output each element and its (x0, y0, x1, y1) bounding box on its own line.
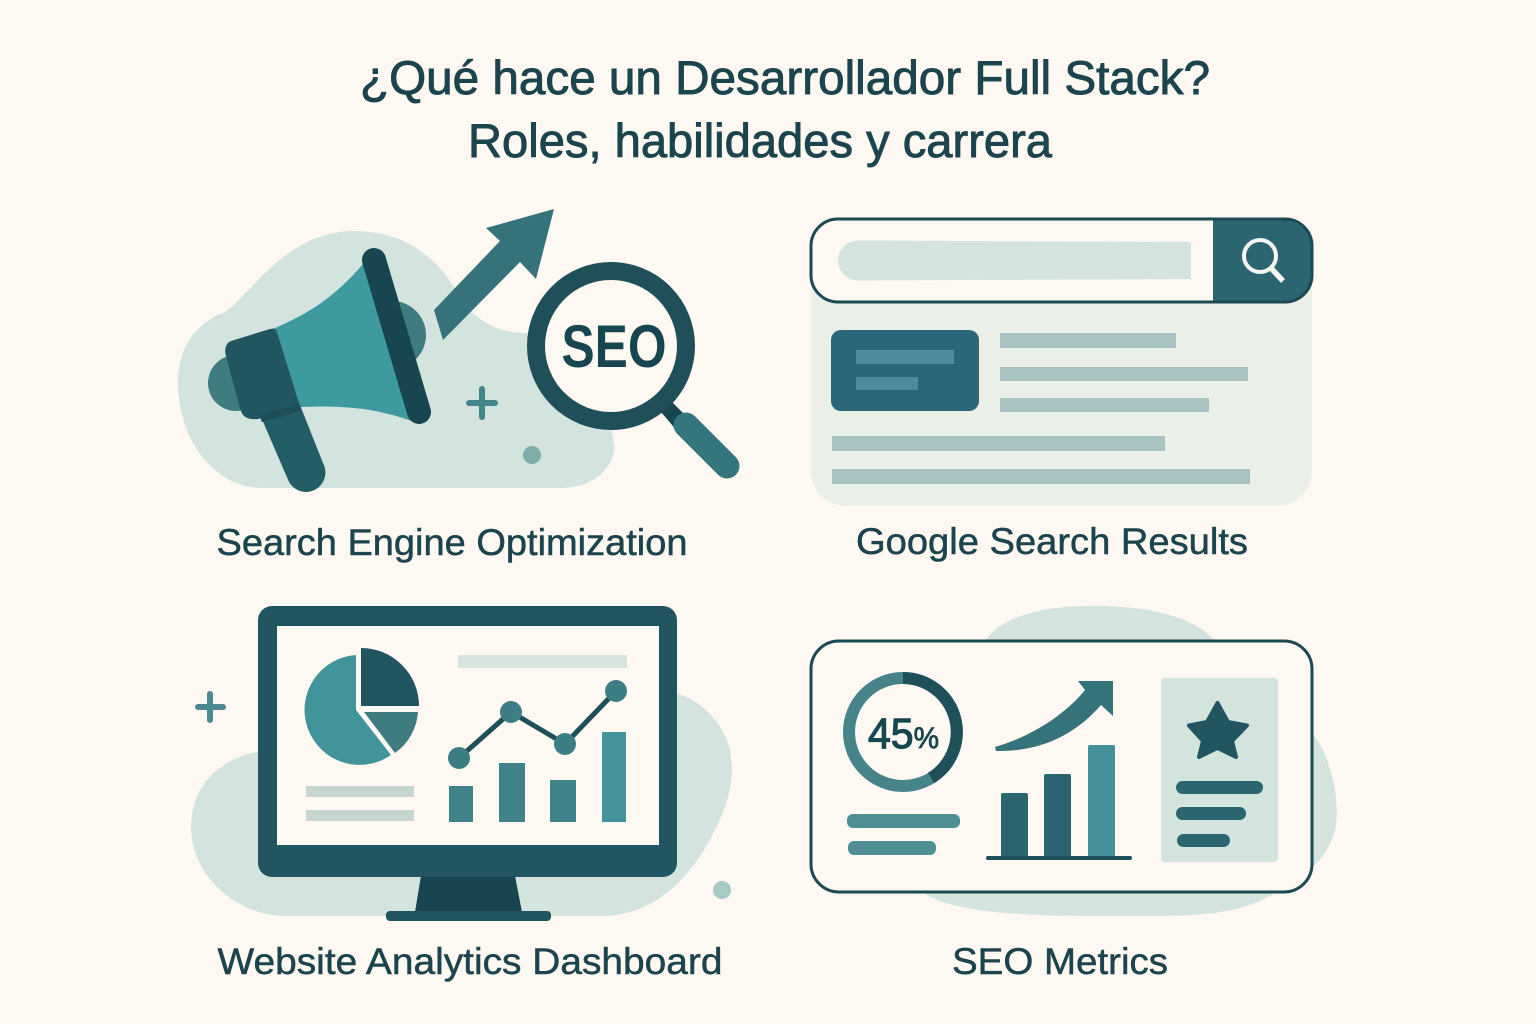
bar chart (449, 732, 626, 822)
result text lines (832, 333, 1250, 484)
icon: plus (469, 389, 495, 417)
results card background (811, 285, 1312, 506)
label: Google Search Results (856, 521, 1248, 562)
growth arrow (995, 681, 1113, 751)
icon: growth arrow (434, 209, 554, 340)
label: Search Engine Optimization (216, 522, 688, 563)
metrics card (811, 641, 1312, 892)
label: Website Analytics Dashboard (218, 941, 722, 982)
background blob (922, 606, 1337, 916)
icon: megaphone (208, 258, 426, 492)
donut gauge 45% (849, 678, 957, 786)
text lines left (847, 814, 960, 855)
result thumbnail (831, 330, 979, 411)
title: Roles, habilidades y carrera (468, 114, 1053, 167)
search bar (811, 219, 1312, 302)
icon: plus (198, 694, 223, 720)
background blob (191, 693, 732, 916)
icon: dot (523, 446, 541, 464)
pie chart (305, 648, 419, 765)
bar chart (986, 745, 1132, 860)
panel: search engine optimization (178, 209, 727, 563)
panel: google search results (811, 219, 1312, 562)
background blob (178, 231, 614, 488)
icon: magnifying glass with SEO: SEO (562, 313, 666, 380)
title: ¿Qué hace un Desarrollador Full Stack? (360, 51, 1210, 104)
icon: dot (713, 881, 731, 899)
line chart (448, 680, 627, 769)
legend lines (306, 655, 627, 821)
rating panel (1161, 678, 1278, 862)
icon: magnifying glass with SEO (536, 271, 727, 466)
title (360, 51, 1210, 167)
panel: website analytics dashboard (191, 606, 732, 982)
panel: seo metrics (811, 606, 1337, 982)
icon: search (1244, 240, 1283, 281)
monitor (258, 606, 677, 921)
donut gauge 45%: 45% (868, 710, 939, 758)
icon: star (1189, 703, 1247, 757)
label: SEO Metrics (952, 941, 1168, 982)
